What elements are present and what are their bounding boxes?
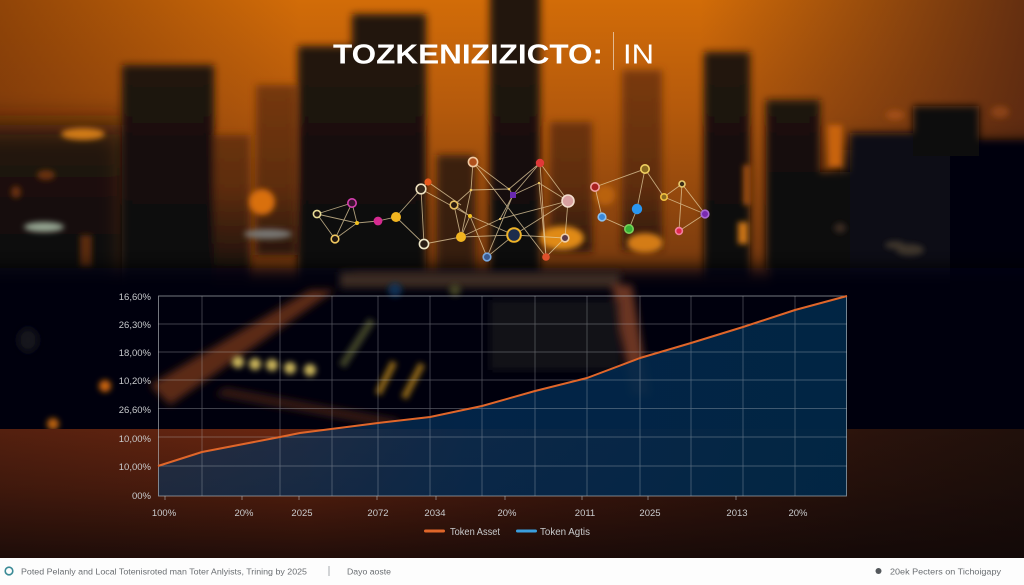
- footer date text: Dayo aoste: [347, 566, 391, 576]
- x axis labels: 20%: [234, 508, 254, 519]
- footer credit text: 20ek Pecters on Tichoigapy: [890, 566, 1002, 576]
- network diagram: right cluster: [591, 165, 709, 234]
- y axis labels: 10,00%: [119, 462, 152, 473]
- footer source text: Poted Pelanly and Local Totenisroted man Toter Anlyists, Trining by 2025: [21, 566, 307, 576]
- x axis labels: 100%: [152, 508, 177, 519]
- title: IN: [623, 38, 654, 70]
- reddish foreground ground band: [0, 429, 1024, 559]
- y axis labels: 26,60%: [119, 405, 152, 416]
- x axis labels: 2072: [367, 508, 389, 519]
- network diagram: left cluster: [313, 157, 574, 261]
- line chart panel: [119, 292, 847, 538]
- blurred city skyline background: [0, 0, 1024, 458]
- y axis labels: 16,60%: [119, 292, 152, 303]
- x axis labels: 2013: [726, 508, 748, 519]
- x axis labels: [152, 508, 808, 519]
- footer icon: ring: [5, 567, 13, 575]
- x axis labels: 2025: [639, 508, 661, 519]
- x axis labels: 20%: [788, 508, 808, 519]
- title: [333, 32, 654, 70]
- y axis labels: 18,00%: [119, 348, 152, 359]
- y axis labels: [119, 292, 152, 502]
- dark plaza below the skyline: [0, 268, 1024, 458]
- x axis labels: 2034: [424, 508, 446, 519]
- x axis labels: 2011: [575, 508, 595, 519]
- title: TOZKENIZIZICTO:: [333, 38, 603, 70]
- y axis labels: 10,00%: [119, 434, 152, 445]
- legend: Token Agtis: [540, 527, 590, 538]
- y axis labels: 26,30%: [119, 320, 152, 331]
- y axis labels: 00%: [132, 491, 152, 502]
- x axis labels: 2025: [291, 508, 313, 519]
- legend: [424, 527, 590, 538]
- x axis labels: 20%: [497, 508, 517, 519]
- blurred city lights: [11, 106, 1009, 267]
- plaza details: [18, 272, 650, 428]
- footer icon: dot: [876, 568, 882, 574]
- footer bar: [0, 558, 1024, 585]
- legend: Token Asset: [450, 527, 500, 538]
- node set: left cluster: [313, 157, 574, 261]
- y axis labels: 10,20%: [119, 376, 152, 387]
- chart area fill: [158, 296, 847, 496]
- series line: token asset: [158, 296, 847, 466]
- node set: right cluster: [591, 165, 709, 234]
